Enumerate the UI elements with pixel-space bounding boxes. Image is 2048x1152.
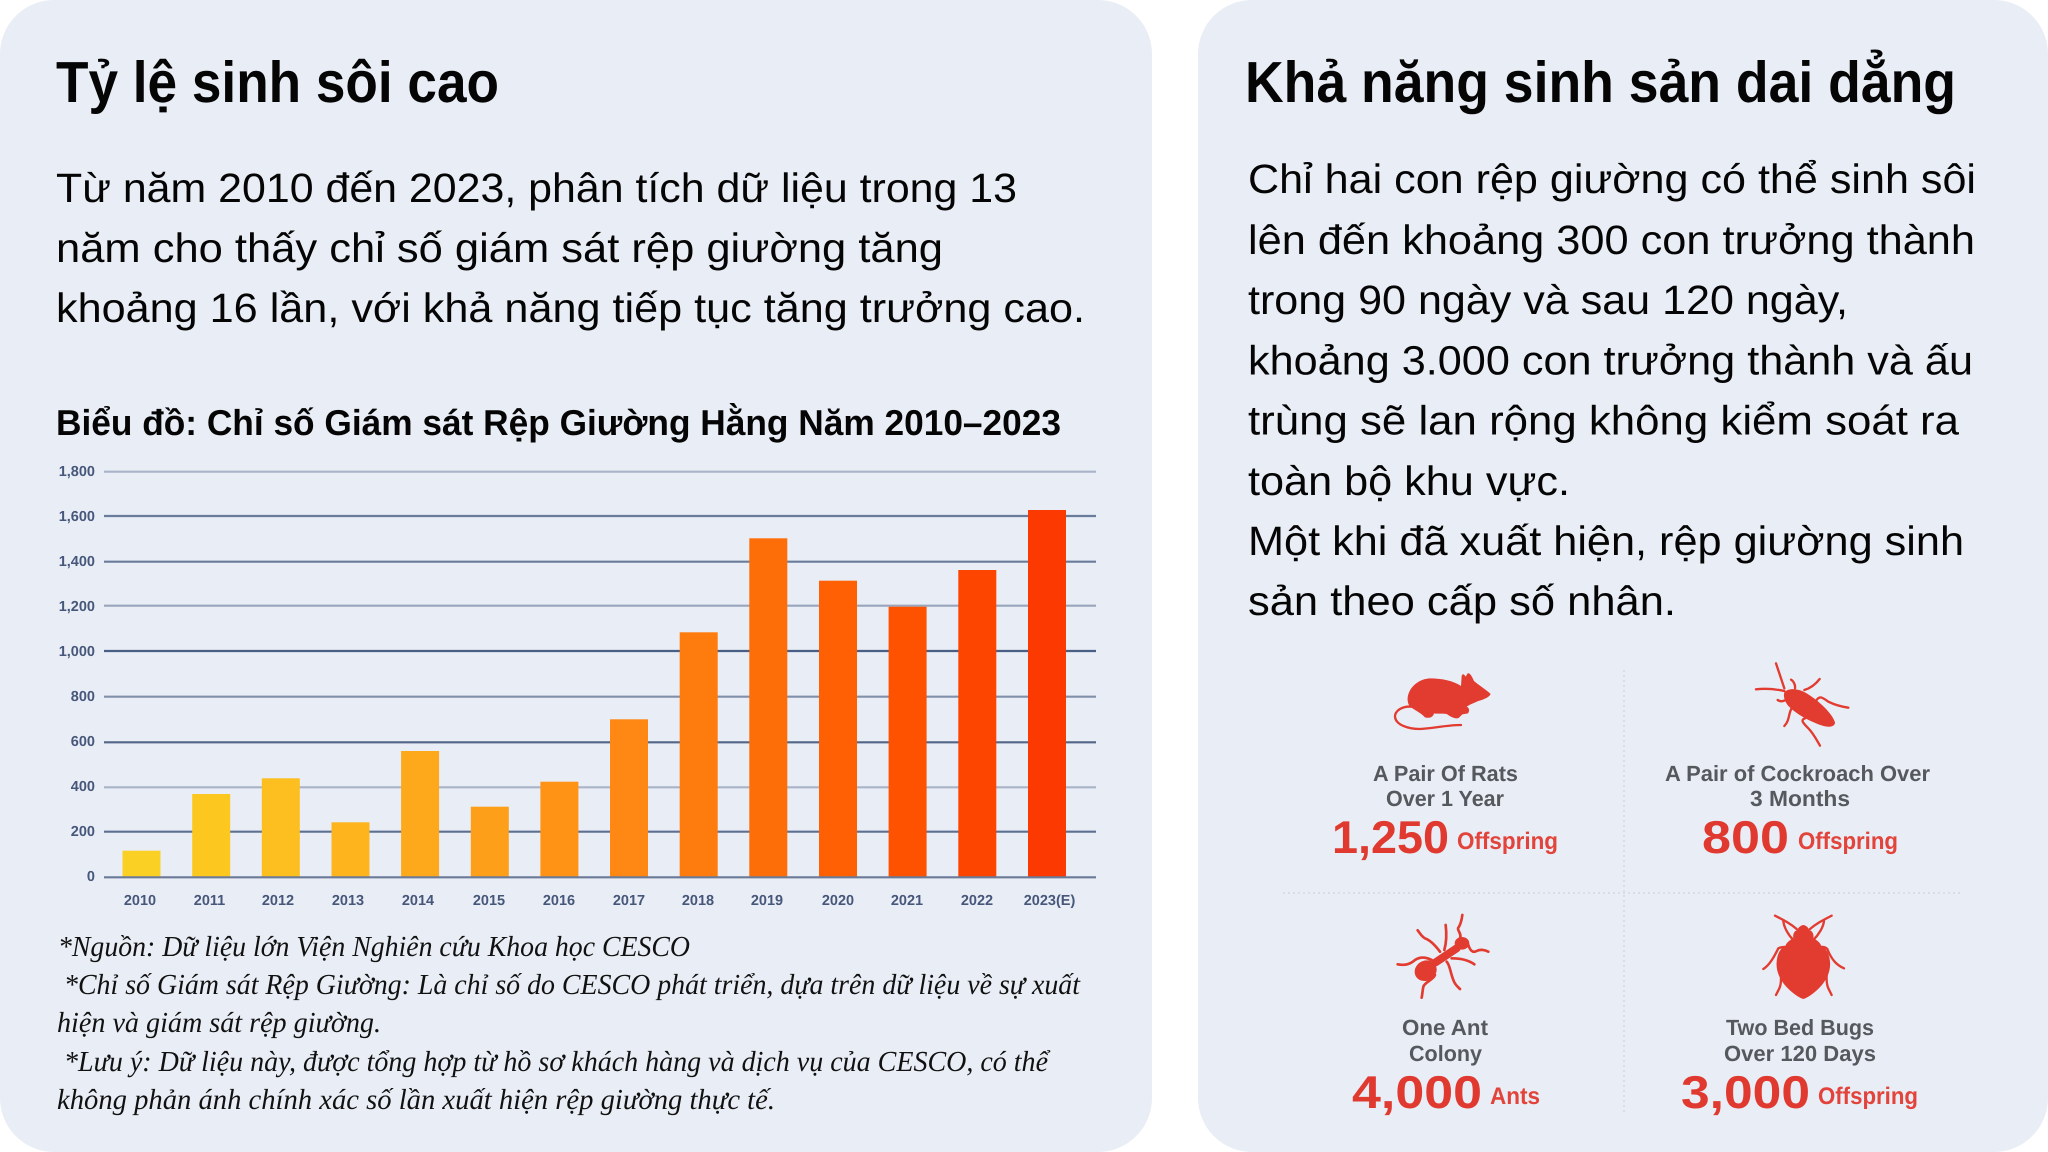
heading: high reproduction rate: Tỷ lệ sinh sôi cao bbox=[56, 50, 499, 115]
bar chart: annual bed bug monitoring index 2010-2023: 400 bbox=[71, 779, 95, 795]
text block: 13-year analysis summary: năm cho thấy chỉ số giám sát rệp giường tăng bbox=[56, 225, 943, 271]
text block: bed bug growth description: Chỉ hai con rệp giường có thể sinh sôi bbox=[1248, 156, 1976, 202]
bar chart: annual bed bug monitoring index 2010-2023: 2018 bbox=[682, 893, 714, 909]
stat: ants: One Ant bbox=[1402, 1015, 1489, 1040]
bar chart: annual bed bug monitoring index 2010-2023: 2021 bbox=[891, 893, 923, 909]
text block: bed bug growth description: trùng sẽ lan rộng không kiểm soát ra bbox=[1248, 398, 1959, 444]
bar chart: annual bed bug monitoring index 2010-2023: 2011 bbox=[194, 893, 225, 909]
bar chart: annual bed bug monitoring index 2010-2023: 600 bbox=[71, 734, 95, 750]
bar chart: annual bed bug monitoring index 2010-2023: 1,400 bbox=[59, 554, 95, 570]
stat: rats: 1,250 bbox=[1332, 811, 1449, 863]
icon: cockroach bbox=[1756, 663, 1848, 746]
bar chart: annual bed bug monitoring index 2010-2023 bbox=[59, 464, 1096, 909]
bar chart: annual bed bug monitoring index 2010-2023: 1,800 bbox=[59, 464, 95, 480]
chart heading: Biểu đồ: Chỉ số Giám sát Rệp Giường Hằng Năm 2010–2023 bbox=[56, 402, 1061, 443]
stat: cockroaches: 3 Months bbox=[1750, 786, 1850, 811]
text block: source notes: không phản ánh chính xác số lần xuất hiện rệp giường thực tế. bbox=[57, 1084, 775, 1116]
stat: rats: A Pair Of Rats bbox=[1373, 761, 1518, 786]
stat: bed bugs bbox=[1681, 916, 1918, 1118]
stat: ants: 4,000 bbox=[1352, 1066, 1482, 1118]
bar chart: annual bed bug monitoring index 2010-2023: 0 bbox=[87, 869, 95, 885]
stat: bed bugs: Offspring bbox=[1818, 1083, 1918, 1110]
bar chart: annual bed bug monitoring index 2010-2023: 2023(E) bbox=[1024, 893, 1075, 909]
bar chart: annual bed bug monitoring index 2010-2023: 200 bbox=[71, 824, 95, 840]
text block: source notes: hiện và giám sát rệp giường. bbox=[57, 1007, 381, 1039]
stat: ants: Ants bbox=[1490, 1083, 1540, 1110]
bar chart: annual bed bug monitoring index 2010-2023: 2010 bbox=[124, 893, 156, 909]
bar chart: annual bed bug monitoring index 2010-2023: 2012 bbox=[262, 893, 294, 909]
stat: bed bugs: Over 120 Days bbox=[1724, 1041, 1876, 1066]
bar chart: annual bed bug monitoring index 2010-2023: 1,200 bbox=[59, 599, 95, 615]
panel: persistent reproductive capacity bbox=[1198, 0, 2048, 1152]
icon: rat bbox=[1395, 673, 1491, 729]
text block: 13-year analysis summary: khoảng 16 lần, với khả năng tiếp tục tăng trưởng cao. bbox=[56, 285, 1085, 331]
stat: bed bugs: 3,000 bbox=[1681, 1066, 1810, 1118]
bar chart: annual bed bug monitoring index 2010-2023: 2022 bbox=[961, 893, 993, 909]
text block: bed bug growth description: Một khi đã xuất hiện, rệp giường sinh bbox=[1248, 518, 1964, 564]
text block: bed bug growth description bbox=[1248, 156, 1976, 624]
text block: 13-year analysis summary: Từ năm 2010 đến 2023, phân tích dữ liệu trong 13 bbox=[56, 165, 1017, 211]
text block: bed bug growth description: khoảng 3.000 con trưởng thành và ấu bbox=[1248, 338, 1973, 384]
text block: source notes: *Nguồn: Dữ liệu lớn Viện Nghiên cứu Khoa học CESCO bbox=[58, 931, 690, 963]
stat: rats bbox=[1332, 673, 1558, 863]
stat: cockroaches bbox=[1665, 663, 1930, 863]
stat: ants: Colony bbox=[1409, 1041, 1483, 1066]
text block: 13-year analysis summary bbox=[56, 165, 1085, 331]
stat: ants bbox=[1352, 915, 1540, 1118]
bar chart: annual bed bug monitoring index 2010-2023: 2019 bbox=[751, 893, 783, 909]
bar chart: annual bed bug monitoring index 2010-2023: 2020 bbox=[822, 893, 854, 909]
icon: bed bug bbox=[1763, 916, 1844, 999]
bar chart: annual bed bug monitoring index 2010-2023: 2014 bbox=[402, 893, 434, 909]
text block: bed bug growth description: lên đến khoảng 300 con trưởng thành bbox=[1248, 217, 1975, 263]
stat: rats: Over 1 Year bbox=[1386, 786, 1504, 811]
stat: cockroaches: A Pair of Cockroach Over bbox=[1665, 761, 1930, 786]
text block: bed bug growth description: sản theo cấp số nhân. bbox=[1248, 578, 1676, 624]
stat: cockroaches: Offspring bbox=[1798, 828, 1898, 855]
bar chart: annual bed bug monitoring index 2010-2023: 2017 bbox=[613, 893, 645, 909]
text block: source notes: *Chỉ số Giám sát Rệp Giường: Là chỉ số do CESCO phát triển, dựa trên dữ liệu về sự xuất bbox=[64, 969, 1081, 1001]
stat: cockroaches: 800 bbox=[1702, 811, 1789, 863]
bar chart: annual bed bug monitoring index 2010-2023: 800 bbox=[71, 689, 95, 705]
bar chart: annual bed bug monitoring index 2010-2023: 1,000 bbox=[59, 644, 95, 660]
stat: bed bugs: Two Bed Bugs bbox=[1726, 1015, 1874, 1040]
text block: source notes: *Lưu ý: Dữ liệu này, được tổng hợp từ hồ sơ khách hàng và dịch vụ của CESCO, có thể bbox=[64, 1046, 1051, 1078]
bar chart: annual bed bug monitoring index 2010-2023: 2015 bbox=[473, 893, 505, 909]
bar chart: annual bed bug monitoring index 2010-2023: 2016 bbox=[543, 893, 575, 909]
text block: source notes bbox=[57, 931, 1081, 1116]
stat: rats: Offspring bbox=[1457, 828, 1558, 855]
text block: bed bug growth description: trong 90 ngày và sau 120 ngày, bbox=[1248, 277, 1848, 323]
bar chart: annual bed bug monitoring index 2010-2023: 2013 bbox=[332, 893, 364, 909]
heading: persistent reproductive capacity: Khả năng sinh sản dai dẳng bbox=[1245, 49, 1956, 115]
icon: ant bbox=[1398, 915, 1488, 998]
text block: bed bug growth description: toàn bộ khu vực. bbox=[1248, 458, 1570, 504]
bar chart: annual bed bug monitoring index 2010-2023: 1,600 bbox=[59, 509, 95, 525]
panel: high reproduction rate bbox=[0, 0, 1152, 1152]
